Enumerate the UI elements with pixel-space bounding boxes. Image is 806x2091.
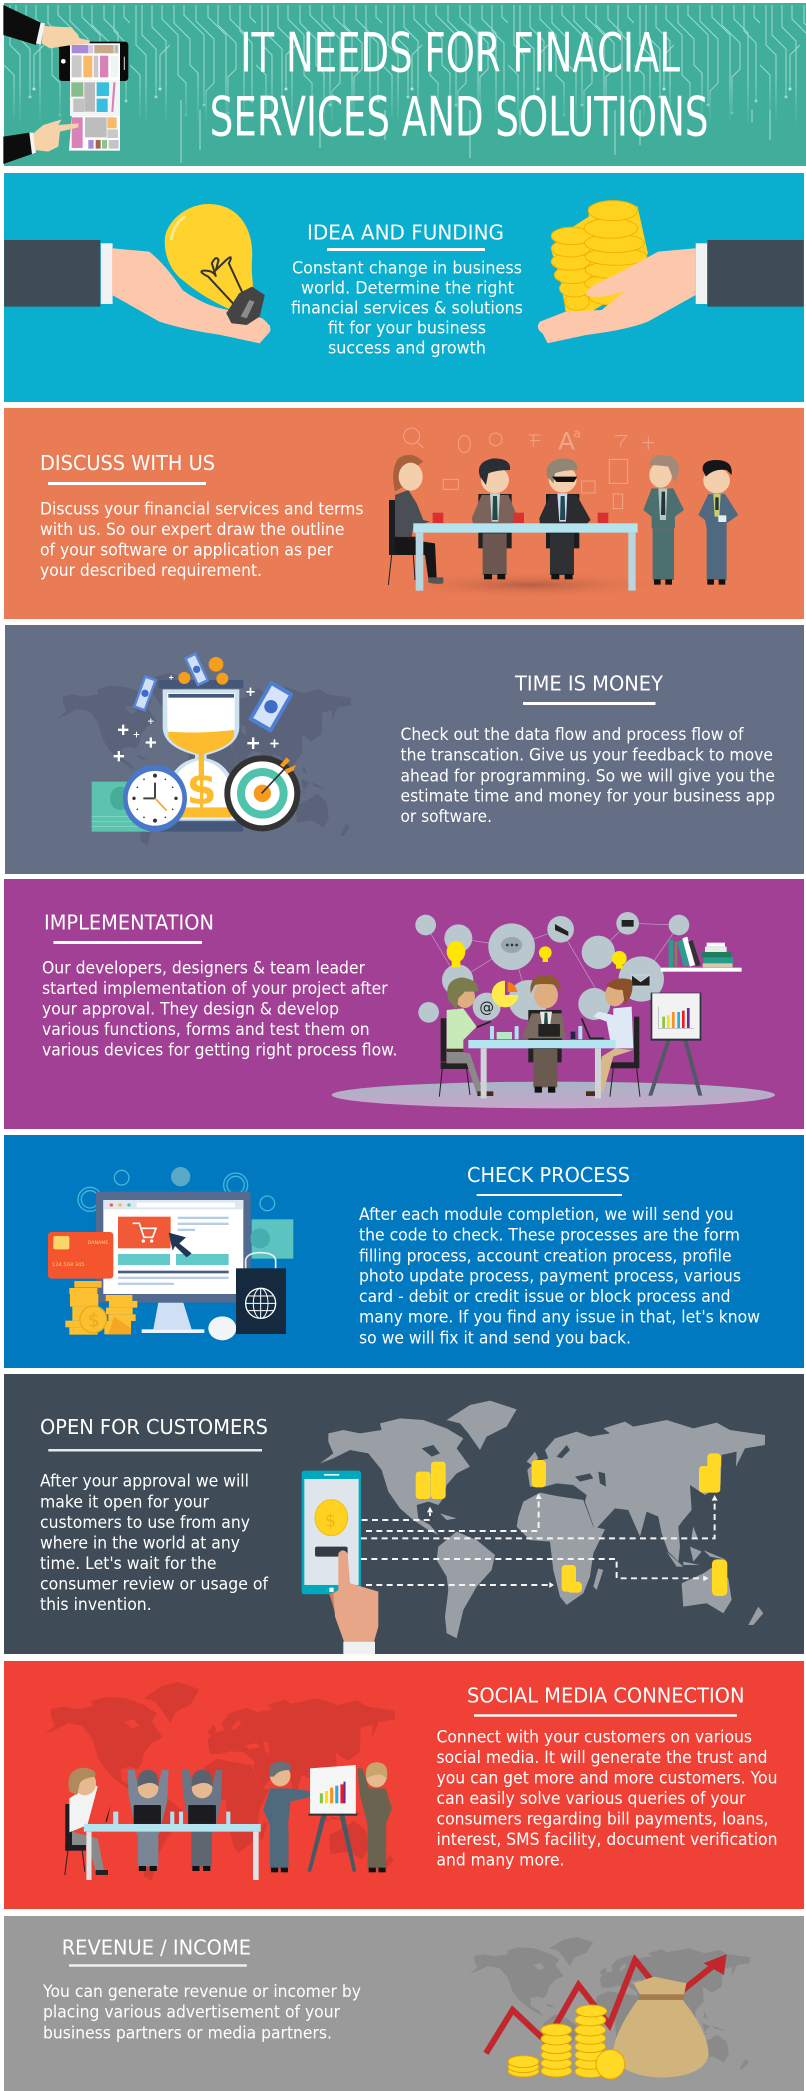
text block: and many more. [436, 1850, 564, 1869]
world map background [44, 1682, 395, 1881]
person: right with laptop [582, 978, 640, 1097]
text block: After each module completion, we will send you [359, 1205, 734, 1224]
text block [42, 958, 397, 1060]
text block: interest, SMS facility, document verification [436, 1830, 778, 1849]
heading: SOCIAL MEDIA CONNECTION [467, 1683, 744, 1707]
person: presenter [263, 1762, 314, 1872]
icon: hand holding light bulb [4, 204, 270, 343]
text block: world. Determine the right [301, 278, 515, 297]
coins on map [416, 1453, 727, 1596]
panel: social media connection [4, 1661, 804, 1909]
illustration: online shopping monitor [48, 1167, 293, 1340]
icons in circles: @ [479, 1000, 494, 1017]
person: standing man in blue suit [698, 460, 738, 585]
person: man with sunglasses [539, 458, 591, 579]
panel: discuss with us [4, 408, 804, 619]
money stack [92, 782, 150, 832]
money bag [613, 1977, 709, 2078]
target with arrow [224, 755, 300, 831]
table with mugs [413, 513, 638, 591]
text block: Connect with your customers on various [436, 1727, 752, 1746]
illustration: team brainstorming at table [332, 912, 775, 1108]
text block [400, 725, 775, 826]
text block: ahead for programming. So we will give you the [400, 766, 775, 785]
text block: this invention. [40, 1595, 152, 1614]
text block: or software. [400, 807, 492, 826]
text block: estimate time and money for your business app [400, 787, 775, 806]
dashed connectors [361, 1499, 715, 1585]
heading: IDEA AND FUNDING [307, 220, 504, 244]
icons in circles [479, 920, 650, 1017]
text block: consumer review or usage of [40, 1574, 269, 1593]
text block: consumers regarding bill payments, loans, [436, 1810, 768, 1829]
heading: IMPLEMENTATION [44, 910, 214, 934]
money rings [78, 1170, 275, 1211]
text block: so we will fix it and send you back. [359, 1328, 631, 1347]
text block [40, 499, 364, 580]
credit card: DANAME [88, 1240, 109, 1246]
text block: You can generate revenue or incomer by [42, 1982, 361, 2001]
panel: revenue / income [4, 1916, 804, 2091]
credit card [48, 1232, 113, 1279]
panel: implementation [4, 879, 804, 1129]
text block: fit for your business [328, 318, 486, 337]
text block: financial services & solutions [291, 298, 523, 317]
title [210, 22, 709, 149]
light bulbs [447, 941, 627, 969]
person: man in brown suit [472, 458, 516, 579]
world map background [58, 673, 351, 846]
illustration: team cheering at presentation [65, 1762, 392, 1880]
text block: card - debit or credit issue or block process and [359, 1287, 731, 1306]
text block: of your software or application as per [40, 541, 333, 560]
text block: Discuss your financial services and terms [40, 499, 364, 518]
person: cheering [182, 1770, 222, 1871]
text block: business partners or media partners. [43, 2023, 332, 2042]
heading: OPEN FOR CUSTOMERS [40, 1415, 268, 1439]
heading: TIME IS MONEY [514, 672, 664, 696]
text block: many more. If you find any issue in that, let's know [359, 1308, 760, 1327]
person: centre with tablet [522, 975, 566, 1093]
shelf with books [661, 937, 742, 972]
heading: REVENUE / INCOME [62, 1935, 251, 1959]
panel: open for customers [4, 1374, 804, 1654]
text block: where in the world at any [40, 1534, 240, 1553]
text block: social media. It will generate the trust and [436, 1748, 768, 1767]
icon: hand holding gold coins [538, 201, 804, 343]
flip chart [307, 1765, 357, 1872]
text block [436, 1727, 778, 1869]
person: cheering [128, 1770, 169, 1871]
phone: $ [325, 1512, 336, 1532]
text block: customers to use from any [40, 1513, 250, 1532]
clock [123, 765, 187, 832]
monitor [96, 1192, 251, 1333]
illustration: world map with phone [302, 1401, 765, 1654]
panel: time is money [5, 625, 804, 874]
text block: Check out the data flow and process flow of [400, 725, 745, 744]
world map background [469, 1937, 750, 2077]
world map [320, 1401, 765, 1638]
text block: success and growth [328, 338, 486, 357]
person: left in green shirt [439, 977, 493, 1097]
text block: can easily solve various queries of your [436, 1789, 746, 1808]
text block: Constant change in business [292, 258, 522, 277]
text block: your described requirement. [40, 561, 262, 580]
text block: various functions, forms and test them on [42, 1020, 370, 1039]
bills and coins [133, 652, 294, 733]
idea circles [415, 912, 689, 1023]
text block: make it open for your [40, 1492, 209, 1511]
illustration: online shopping monitor: $ [88, 1311, 100, 1332]
growth arrow [486, 1954, 727, 2053]
text block: the code to check. These processes are the form [359, 1226, 740, 1245]
person: seated woman [388, 455, 443, 585]
table [84, 1812, 261, 1880]
illustration: hourglass, clock and target: $ [187, 764, 217, 814]
illustration: team meeting at table: A [558, 427, 576, 455]
panel: idea and funding [4, 173, 804, 402]
shopping bag with globe [236, 1253, 286, 1334]
text block: various devices for getting right process flow. [42, 1041, 397, 1060]
hand tapping phone [329, 1550, 378, 1654]
text block: filling process, account creation process, profile [359, 1246, 732, 1265]
credit card: 124 568 345 [52, 1262, 85, 1268]
panel: header [3, 3, 806, 166]
text block [291, 258, 523, 357]
panel: check process [4, 1135, 804, 1368]
text block: you can get more and more customers. You [436, 1769, 778, 1788]
coin stacks [65, 1281, 137, 1335]
person: seated with laptop [65, 1768, 111, 1875]
person: standing with arm raised [357, 1762, 392, 1872]
text block: started implementation of your project after [42, 979, 388, 998]
text block: with us. So our expert draw the outline [40, 520, 344, 539]
table [468, 1026, 616, 1098]
text block: time. Let's wait for the [40, 1554, 216, 1573]
heading: DISCUSS WITH US [40, 451, 215, 475]
text block: photo update process, payment process, various [359, 1267, 741, 1286]
illustration: money bag, coins and growth arrow [486, 1954, 727, 2079]
text block [40, 1472, 269, 1614]
text block: After your approval we will [40, 1472, 249, 1491]
sparkles [114, 675, 279, 761]
phone [302, 1471, 361, 1594]
heading: CHECK PROCESS [467, 1163, 630, 1187]
coin stacks [508, 2005, 625, 2079]
illustration: team meeting at table [387, 426, 738, 598]
text block: your approval. They design & develop [42, 1000, 339, 1019]
text block: placing various advertisement of your [43, 2003, 340, 2022]
illustration: hourglass, clock and target [92, 652, 300, 832]
text block: the transcation. Give us your feedback to move [400, 746, 773, 765]
icon: hands holding phone with newspaper [3, 5, 128, 164]
person: standing man in green suit [643, 455, 684, 585]
flip chart [648, 993, 702, 1096]
text block [359, 1205, 760, 1347]
text block [42, 1982, 361, 2042]
text block: Our developers, designers & team leader [42, 958, 365, 977]
illustration: team meeting at table: a [573, 426, 581, 440]
